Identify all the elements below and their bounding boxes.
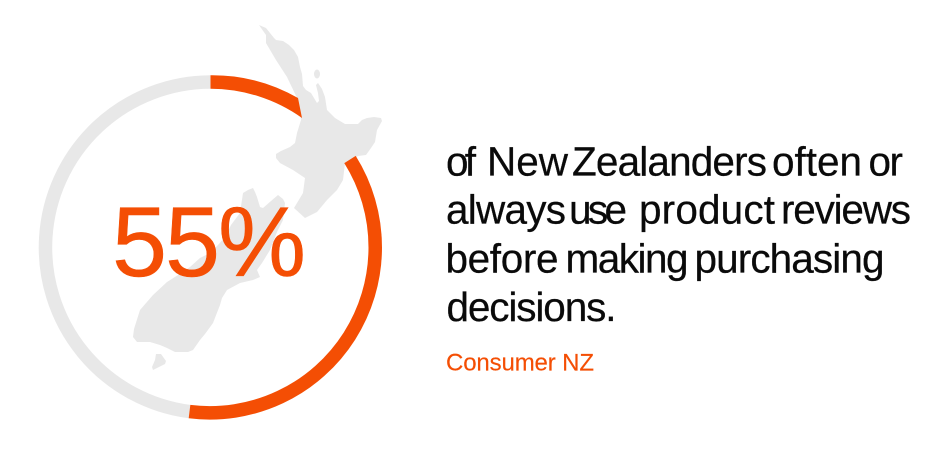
North Island [259,25,382,218]
ring track [45,82,211,412]
map: New Zealand [133,25,382,370]
statement text: purchasing [694,235,884,281]
statement text: making [566,235,688,281]
statement text: of [446,139,477,185]
statement text: product [639,186,775,232]
statement text: use [569,186,627,232]
statement text [446,139,911,330]
source: Consumer NZ [446,350,594,376]
statement text: always [446,186,566,232]
South Island [133,188,285,352]
statement text: decisions. [446,284,616,330]
statement text: New [487,139,569,185]
statement text: often [772,139,862,185]
statement text: reviews [781,186,911,232]
ring arc: upper segment [210,75,302,118]
statement text: Zealanders [572,139,767,185]
Great Barrier Island [314,70,320,78]
Stewart Island [152,354,166,370]
big number: 55% [112,186,306,297]
statement text: or [868,139,903,185]
ring arc: lower segment [190,160,375,413]
statement text: before [446,235,558,281]
